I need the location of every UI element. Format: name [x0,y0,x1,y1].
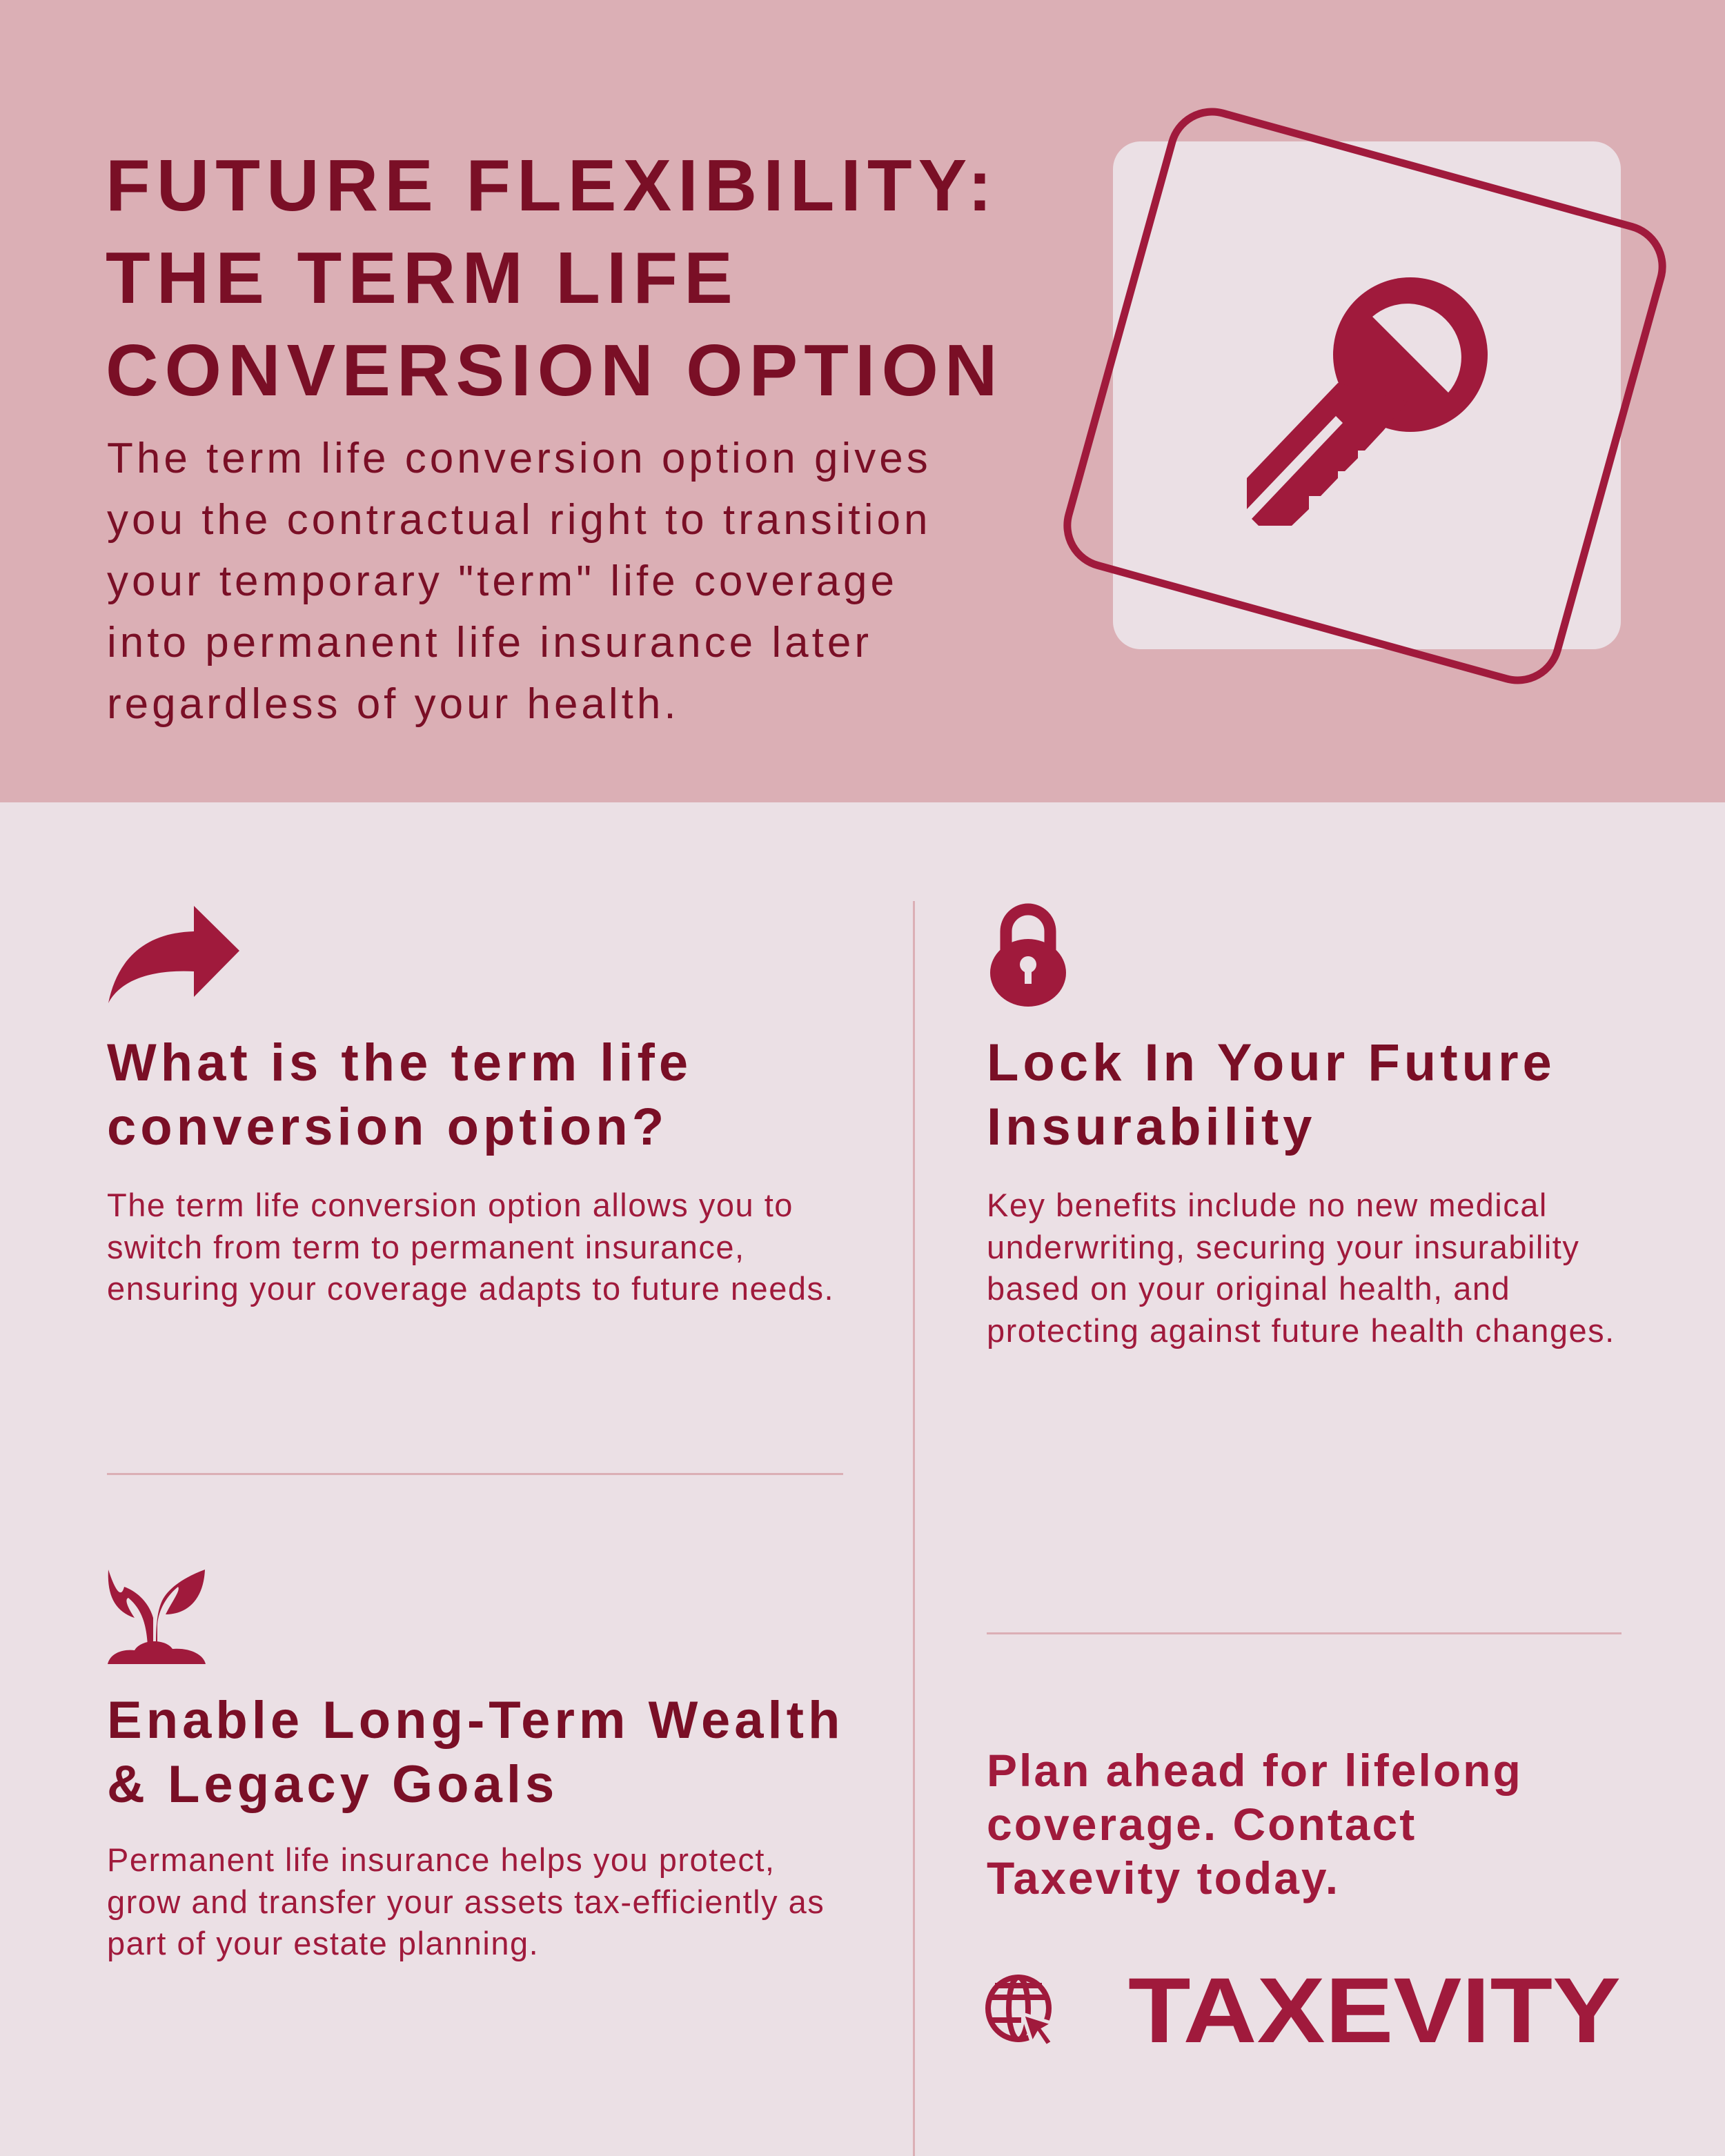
title: FUTURE FLEXIBILITY: [106,145,998,226]
heading [107,1691,844,1814]
body text: part of your estate planning. [107,1925,539,1961]
panel: long-term wealth [107,1570,844,1961]
body text: Permanent life insurance helps you protect, [107,1841,775,1878]
body text: The term life conversion option allows you to [107,1187,793,1223]
title: THE TERM LIFE [106,237,739,319]
icon: curved arrow [108,906,239,1003]
intro paragraph: your temporary "term" life coverage [107,557,898,605]
intro paragraph: The term life conversion option gives [107,435,931,482]
body text: Key benefits include no new medical [987,1187,1548,1223]
body text: based on your original health, and [987,1270,1510,1307]
body text: grow and transfer your assets tax-efficiently as [107,1883,825,1919]
heading: Enable Long-Term Wealth [107,1691,844,1750]
intro paragraph: you the contractual right to transition [107,496,931,544]
heading [987,1034,1556,1156]
icon: padlock [990,904,1066,1007]
key illustration [1063,108,1666,684]
vertical divider [913,901,915,2156]
body text: switch from term to permanent insurance, [107,1228,745,1265]
intro paragraph: into permanent life insurance later [107,619,872,666]
call to action: Taxevity today. [987,1852,1340,1903]
icon: sprout [108,1570,206,1664]
heading: What is the term life [107,1034,692,1092]
body text: ensuring your coverage adapts to future needs. [107,1270,834,1307]
title: CONVERSION OPTION [106,330,1003,411]
header band [0,0,1725,802]
call to action: Plan ahead for lifelong [987,1745,1523,1796]
body text [107,1841,825,1961]
title [106,145,1003,411]
heading: conversion option? [107,1098,668,1156]
panel: what is the term life conversion option [107,906,834,1307]
intro paragraph [107,435,931,728]
call to action: coverage. Contact [987,1799,1417,1850]
heading: & Legacy Goals [107,1755,558,1814]
body text [987,1187,1615,1349]
heading [107,1034,692,1156]
heading: Lock In Your Future [987,1034,1556,1092]
body text: protecting against future health changes. [987,1312,1615,1348]
icon: globe [988,1977,1049,2039]
call to action [987,1745,1523,1903]
heading: Insurability [987,1098,1316,1156]
body text [107,1187,834,1307]
logo: globe icon and TAXEVITY wordmark [985,1959,1621,2056]
intro paragraph: regardless of your health. [107,680,680,728]
body text: underwriting, securing your insurability [987,1228,1579,1265]
panel: lock in your future insurability [987,904,1615,1349]
